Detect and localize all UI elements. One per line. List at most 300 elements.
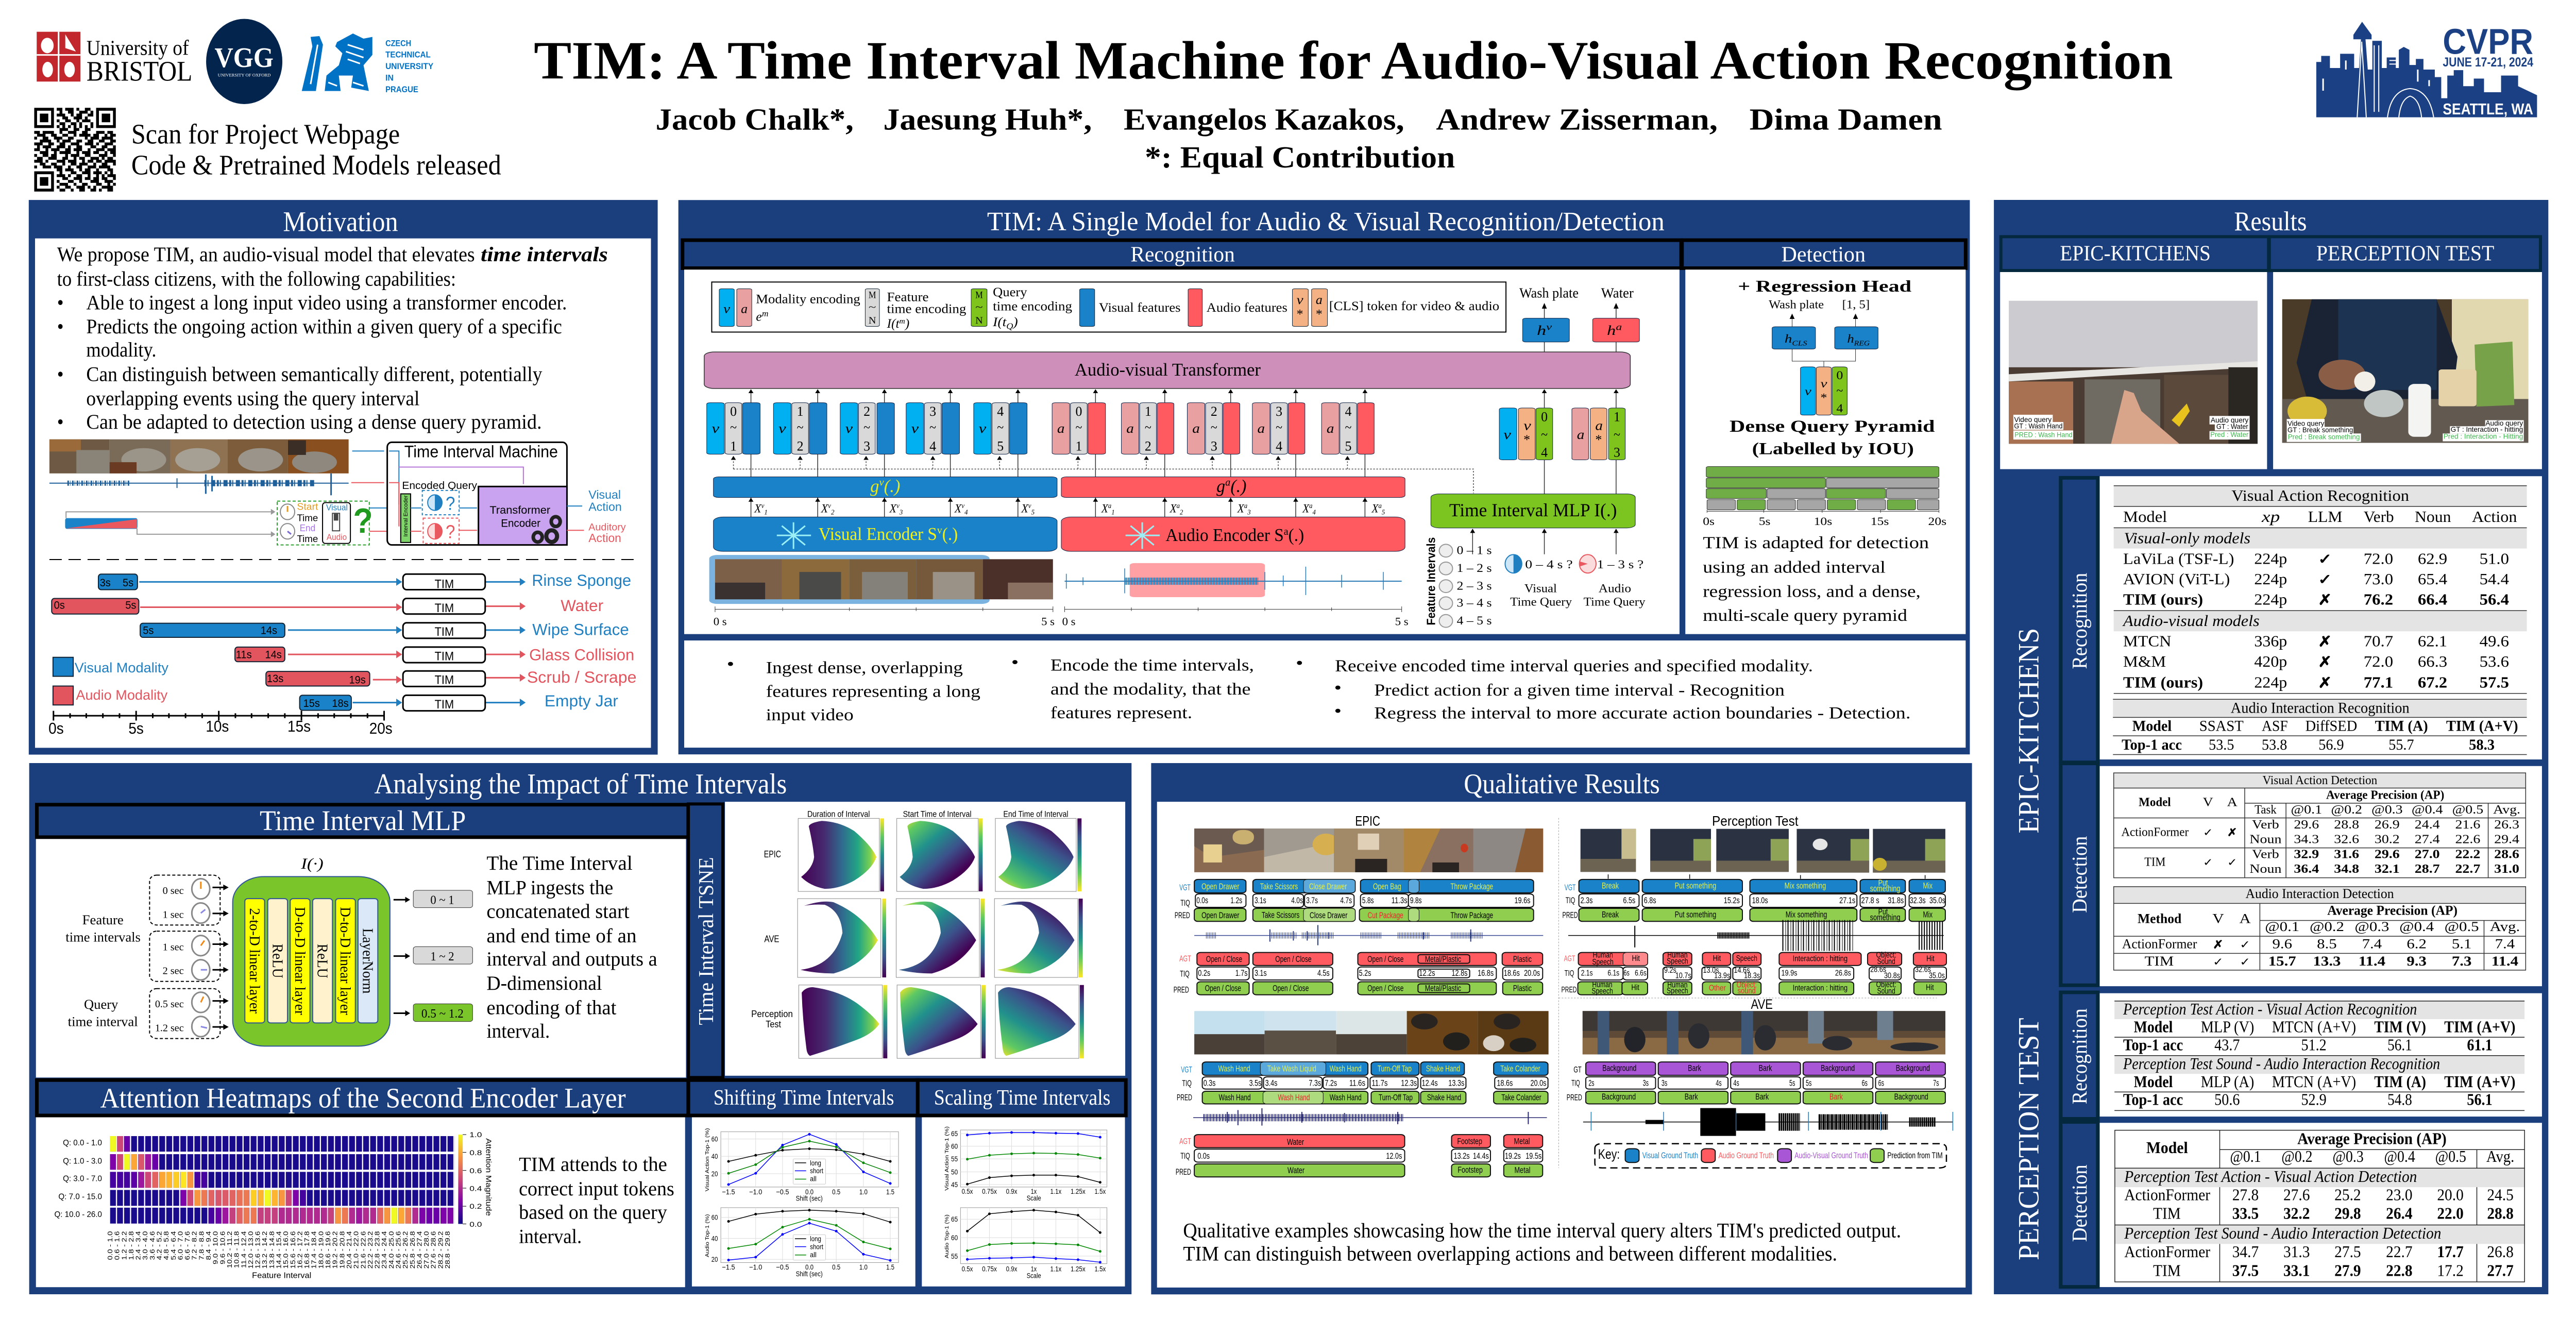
table: visual action recognition: 65.4 [2418,571,2447,588]
AVE: rows: Bark [1829,1092,1843,1102]
line chart: scale audio: 0.9x [1006,1264,1018,1273]
legend box: a [741,301,748,316]
interval timeline rows: 5s [123,577,133,589]
Perception Test: visual rows: 18.0s [1752,896,1768,905]
AVE: rows: Background [1896,1063,1930,1073]
EPIC-KITCHENS results section [2012,476,2542,986]
query tokens: v [1503,427,1511,442]
subheader: PERCEPTION TEST: PERCEPTION TEST [2316,242,2494,265]
EPIC example 1: visual labels: 4.7s [1340,896,1352,905]
audio tokens: 2 [1211,404,1217,419]
table: visual action detection: 36.4 [2294,862,2319,876]
EPIC example 2: audio rows: 0.0s [1197,1152,1210,1161]
EPIC example 2: visual rows: Wash Hand [1330,1064,1362,1073]
time interval machine diagram: Interval Encoder [402,495,409,537]
logo: Czech Technical University in Prague: PRAGUE [385,84,418,94]
table: audio interaction recognition: 53.5 [2209,736,2234,753]
EPIC example 2: visual rows [1177,1062,1548,1104]
right column: TSNE, shifting and scaling [688,802,1126,1287]
bottom bullets: Ingest dense, overlapping [766,658,963,677]
EPIC example 1: audio rows: 5.2s [1359,969,1371,978]
demo video: EPIC-KITCHENS: GT : Wash Hand [2014,422,2062,430]
attention heatmap chart: 1.2 - 2.2 [121,1231,128,1260]
section titles [1355,814,1799,1012]
legend box: a [1316,293,1323,307]
subheader: scaling time intervals [918,1080,1126,1115]
AVE: rows: TIQ [1571,1078,1580,1088]
attention heatmap chart: 24.6 - 25.6 [395,1231,402,1269]
audio tokens: 0 [1075,404,1082,419]
table: perception test detection: 33.5 [2232,1205,2259,1223]
demo video: Perception Test: Audio query [2485,420,2523,428]
motivation text block: • [57,316,64,338]
AVE: rows: GT [1573,1065,1582,1074]
attention heatmap chart: 22.2 - 23.2 [367,1231,375,1269]
table: visual action detection: 26.9 [2375,818,2400,832]
table: perception test recognition: MLP (A) [2201,1073,2254,1091]
table: visual action recognition: Noun [2415,509,2451,526]
table: visual action recognition: 56.4 [2480,591,2509,608]
logo: University of Bristol [37,32,192,87]
audio tokens [1052,403,1374,454]
AVE: rows: 3s [1662,1078,1667,1088]
Perception Test: visual rows: 6.8s [1644,896,1656,905]
line chart: scale audio: 0.75x [982,1264,997,1273]
Perception Test: audio rows: 32.6s [1915,965,1931,974]
panel: TIM single model: TIM is adapted for detection [1703,533,1929,552]
authors: Jaesung Huh*, [883,103,1092,137]
MLP description: The Time Interval [486,852,633,874]
arrows between tokens, encoders and transformer: 4 [1313,509,1316,516]
table: perception test detection: @0.2 [2281,1148,2313,1165]
subheader: attention heatmaps [37,1080,688,1115]
line chart: shift visual: −1.5 [722,1188,735,1196]
arrows between tokens, encoders and transformer: v [761,502,765,510]
visual tokens: ~ [730,420,737,435]
Perception Test: audio rows: 14.6s [1734,966,1750,975]
attention heatmap chart: 0.6 - 1.6 [114,1231,121,1260]
table: audio interaction detection: @0.2 [2310,919,2344,934]
table: visual action recognition: Verb [2364,509,2394,526]
MLP description: MLP ingests the [486,876,613,899]
feature intervals and queries [1425,537,1646,628]
line chart: shift audio: 1.5 [886,1263,894,1271]
arrows between tokens, encoders and transformer: v [961,502,965,510]
table: audio interaction recognition: 58.3 [2469,736,2495,753]
interval timeline rows: Glass Collision [529,646,634,664]
EPIC example 1: waveform [1194,925,1543,945]
EPIC example 2: audio rows: 19.5s [1526,1152,1541,1161]
table: visual action detection: Noun [2249,862,2281,876]
query tokens: 1 [1614,410,1620,424]
MLP network block: LayerNorm [360,928,376,994]
time axis: 10s [206,718,229,736]
bottom bullets: • [1011,653,1019,671]
subheader: detection [1682,240,1965,268]
time interval machine diagram: Transformer [489,504,550,516]
panel: TIM single model: Time Query [1584,595,1646,608]
legend box: ) [904,316,909,331]
interval timeline rows: TIM [435,697,454,711]
legend box: e [756,309,769,324]
panel: motivation [29,200,658,755]
feature intervals and queries: 0 – 4 s ? [1525,558,1573,571]
EPIC example 1: audio rows: Metal/Plastic [1425,955,1461,964]
table: visual action recognition: Model [2123,509,2167,526]
panel: analysing the impact of time intervals [29,763,1131,1294]
table: visual action recognition: ✗ [2318,634,2332,650]
detection: regression head: 0 [1836,369,1843,382]
table: visual action recognition: 224p [2254,551,2287,568]
table: visual action detection: A [2227,795,2238,809]
detection: regression head: CLS [1792,340,1807,347]
interval timeline rows: 5s [143,624,154,637]
line chart: shift audio: long [810,1235,821,1243]
MLP network block: ReLU [269,944,286,978]
EPIC example 1: visual labels: Throw Package [1450,882,1493,891]
arrows between tokens, encoders and transformer: v [828,502,831,510]
table: audio interaction detection: 11.4 [2492,954,2518,969]
subheader: PERCEPTION TEST [2269,236,2540,270]
Perception Test: audio rows: 30.8s [1884,971,1900,980]
table: perception test detection: 22.7 [2386,1243,2413,1261]
key legend: Audio-Visual Ground Truth [1794,1151,1868,1160]
line chart: shift visual: 60 [711,1135,718,1143]
bottom bullets: Receive encoded time interval queries and specified modality. [1335,656,1813,675]
EPIC example 1: visual labels: Cut Package [1368,911,1403,920]
arrows between tokens, encoders and transformer: X [1371,502,1389,515]
motivation text block: to first-class citizens, with the following capabilities: [57,268,456,291]
table: visual action detection: 32.1 [2375,862,2400,876]
pyramid axis labels: 0s [1703,515,1715,528]
EPIC example 1: visual rows [1194,880,1534,921]
EPIC example 1: audio rows: Open / Close [1206,955,1242,964]
table: visual action detection: 27.0 [2415,847,2440,861]
table: visual action detection: 31.6 [2334,847,2359,861]
line chart: shift audio: all [810,1250,817,1259]
Perception Test: audio rows: Speech [1592,957,1614,967]
line chart: shift visual: 40 [711,1152,718,1160]
attention heatmap chart: 19.8 - 20.8 [338,1231,346,1269]
output predictions: v [1546,322,1552,332]
table: visual action recognition: 49.6 [2480,633,2509,650]
table: visual action detection: 22.2 [2455,847,2480,861]
timelines [714,606,1409,628]
Perception Test: visual rows: 6.5s [1623,896,1635,905]
table: perception test recognition: TIM (A+V) [2444,1018,2515,1036]
Perception Test: audio rows: Human [1667,951,1687,959]
table: audio interaction detection: ✓ [2213,955,2224,968]
attention heatmap chart: 26.4 - 27.4 [416,1231,423,1269]
Perception Test: audio rows: 18.3s [1744,971,1760,980]
Perception Test: visual rows: TIQ [1566,896,1575,905]
section titles: Perception Test [1712,814,1799,829]
line chart: shift audio: 60 [711,1213,718,1222]
g visual and g audio layers: g [870,477,891,496]
EPIC example 2: audio rows: 19.2s [1505,1152,1521,1161]
attention heatmap chart: 4.8 - 5.8 [163,1231,171,1260]
table: perception test detection: 34.7 [2232,1243,2259,1261]
interval timeline rows: Scrub / Scrape [527,669,637,686]
table: perception test recognition: MTCN (A+V) [2272,1018,2356,1036]
table: perception test detection: ActionFormer [2124,1186,2210,1204]
attention heatmap chart: 3.6 - 4.6 [149,1231,157,1260]
Perception Test: visual rows: Break [1602,910,1619,920]
audio tokens: ~ [1145,420,1151,435]
Perception Test: audio rows: AGT [1564,954,1575,963]
attention heatmap chart: 14.4 - 15.4 [275,1231,283,1269]
TSNE plots: Start Time of Interval [903,809,972,819]
table: perception test detection: 27.5 [2334,1243,2361,1261]
detection: regression head: ~ [1836,384,1843,397]
EPIC example 1: audio rows: Open / Close [1367,955,1403,964]
TSNE plots: Duration of Interval [807,809,870,819]
line chart: shift visual: −1.0 [749,1188,762,1196]
EPIC example 1: audio rows: AGT [1179,954,1191,963]
modality legend [53,657,168,705]
attention heatmap chart: 0.8 [469,1149,482,1157]
table: perception test recognition: MLP (V) [2201,1018,2254,1036]
recognition tab: Recognition [2069,573,2091,669]
Perception Test: audio rows: sound [1738,986,1756,995]
EPIC example 2: visual rows: Wash Hand [1219,1093,1251,1103]
Perception Test: audio rows: 6.6s [1635,969,1647,977]
MLP diagram: feature and query intervals: 2 sec [163,965,184,976]
EPIC example 1: audio rows: 3.1s [1255,969,1267,978]
table: audio interaction detection: @0.4 [2399,919,2434,934]
MLP description: and end time of an [486,924,637,947]
table: audio interaction detection: 13.3 [2313,954,2341,969]
table: visual action detection: 28.8 [2334,818,2359,832]
audio tokens: 3 [1211,439,1217,454]
attention heatmap chart: Attention Magnitude [484,1138,493,1216]
Perception Test: audio rows: PRED [1561,985,1577,994]
interval timeline rows: Empty Jar [545,692,618,710]
line chart: shift visual: 1.5 [886,1188,894,1196]
table: perception test detection: 20.0 [2437,1186,2464,1204]
EPIC example 2: waveform [1193,1108,1547,1126]
attention heatmap chart: 9.0 - 10.0 [212,1231,219,1264]
attention heatmap chart: 3.0 - 4.0 [142,1231,149,1260]
visual tokens [707,403,1027,454]
query tokens: ~ [1541,427,1548,442]
table: perception test detection: ActionFormer [2124,1243,2210,1261]
logos and QR code block: TECHNICAL [385,50,431,59]
table: perception test recognition: 61.1 [2467,1036,2493,1054]
table: visual action recognition: 66.3 [2418,653,2447,671]
Perception Test: audio rows: 26.8s [1835,969,1851,977]
visual tokens: ~ [929,420,936,435]
table: perception test recognition: Model [2134,1073,2173,1091]
Perception Test: audio rows: Speech [1591,987,1613,996]
interval timeline rows: TIM [435,649,454,663]
table: perception test detection: 33.1 [2283,1262,2310,1280]
line chart: shift visual: −0.5 [776,1188,789,1196]
table: visual action recognition: ✗ [2318,654,2332,670]
EPIC example 2: visual rows: Take Colander [1501,1093,1541,1103]
analysing heading: Analysing the Impact of Time Intervals [375,768,787,800]
table: visual action recognition [2114,486,2527,694]
time interval machine diagram: Auditory [588,522,626,533]
EPIC example 1: audio rows: PRED [1174,985,1189,994]
AVE: rows: 7s [1933,1078,1939,1088]
legend box: m [762,309,769,318]
time interval machine diagram: Visual [588,488,621,501]
legend box: ~ [869,301,876,312]
EPIC example 1: visual labels: 4.0s [1291,896,1303,905]
line chart: scale visual: 60 [951,1142,958,1151]
photo strip: EPIC top [1194,828,1543,872]
table: visual action detection: V [2203,795,2213,809]
query interval selector: End [300,523,315,533]
legend box: Q [1006,322,1013,331]
feature intervals and queries: 1 – 3 s ? [1597,558,1643,571]
EPIC example 2: visual rows: 7.2s [1325,1078,1337,1088]
EPIC example 2: visual rows: Shake Hand [1426,1064,1460,1073]
EPIC example 2: visual rows: Turn-Off Tap [1379,1093,1413,1103]
visual tokens: 1 [797,404,804,419]
table: audio interaction recognition: TIM (A) [2375,718,2428,734]
Perception Test: audio rows: Hit [1926,983,1934,992]
MLP network block: D-to-D linear layer [292,907,308,1015]
bottom bullets: • [1334,678,1342,697]
table: visual action detection: Noun [2249,832,2281,846]
table: perception test detection: 29.8 [2334,1205,2361,1223]
line chart: scale visual: 0.5x [962,1187,973,1196]
table: audio interaction detection: 9.6 [2272,937,2292,952]
table: perception test recognition: 56.1 [2467,1091,2493,1109]
attention heatmap chart: 0.6 [469,1168,482,1175]
bottom bullets: • [727,654,734,673]
Perception Test: visual rows: 31.8s [1888,896,1904,905]
legend box: v [723,301,730,316]
interval timeline rows: 14s [265,649,282,661]
g visual and g audio layers: g [1216,477,1238,496]
Perception Test: visual rows: VGT [1565,883,1575,892]
table: perception test recognition: 56.1 [2387,1036,2412,1054]
table: visual action detection: Verb [2252,818,2279,832]
EPIC example 2: audio rows: Metal [1514,1165,1531,1175]
Perception Test: waveform [1568,926,1944,948]
time interval machine diagram: Action [588,500,622,514]
Perception Test: visual rows: Put something [1675,881,1716,890]
demo video: Perception Test [2282,299,2528,443]
table: visual action recognition: 62.1 [2418,633,2447,650]
arrows between tokens, encoders and transformer: 5 [1031,509,1035,516]
Perception Test: audio rows: Hit [1632,954,1640,963]
attention heatmap chart: Q: 0.0 - 1.0 [63,1138,102,1147]
bottom bullets: • [1334,701,1342,720]
EPIC example 1: audio rows: 0.2s [1198,969,1210,978]
g visual and g audio layers: (.) [1230,477,1246,496]
EPIC example 2: visual rows: 12.3s [1401,1078,1417,1088]
Perception Test: audio rows [1561,951,1946,996]
EPIC example 2: visual rows: Take Colander [1500,1064,1540,1073]
TSNE plots: EPIC [764,849,781,860]
motivation text block: We propose TIM, an audio-visual model that elevates [57,244,475,266]
legend box: I(t [993,315,1021,329]
legend box: M [869,289,876,300]
table: perception test detection: @0.3 [2332,1148,2364,1165]
time interval TSNE tab: Time Interval TSNE [694,857,718,1025]
table: visual action detection: 28.7 [2415,862,2440,876]
demo video: Perception Test: Video query [2287,420,2324,428]
feature intervals and queries: 1 – 2 s [1457,562,1492,575]
motivation text block: modality. [86,339,156,362]
arrows between tokens, encoders and transformer: 2 [1180,509,1183,516]
audio tokens: 2 [1145,439,1151,454]
table: perception test recognition: TIM (V) [2374,1018,2426,1036]
dense query pyramid heading [1730,417,1935,458]
attention heatmap chart: Q: 7.0 - 15.0 [58,1192,102,1201]
audio waveform [49,474,349,495]
line chart: shift visual: long [810,1159,821,1167]
table: audio interaction recognition: Audio Interaction Recognition [2231,699,2410,716]
table: perception test detection: @0.1 [2230,1148,2261,1165]
table: perception test recognition: 51.2 [2301,1036,2327,1054]
MLP diagram: feature and query intervals: Feature [82,912,124,927]
visual tokens: 4 [929,439,936,454]
line chart: scale visual: 1.5x [1094,1187,1106,1196]
output predictions [1519,285,1639,352]
AVE: rows: Bark [1688,1063,1701,1073]
project webpage text: Scan for Project Webpage [131,119,400,150]
table: visual action recognition: 73.0 [2364,571,2393,588]
MLP outputs [394,890,472,1022]
Perception Test: visual rows: 27.8 s [1861,896,1879,905]
table: audio interaction recognition: TIM (A+V) [2446,718,2518,734]
EPIC example 1: audio rows: 18.6s [1504,969,1520,978]
attention heatmap chart: 6.0 - 7.0 [177,1231,184,1260]
legend box: Query [993,285,1027,299]
table: audio interaction recognition: DiffSED [2306,718,2357,734]
time axis: 15s [287,718,311,736]
Perception Test: audio rows: Human [1667,980,1687,990]
Perception Test: audio rows: 19.9s [1781,969,1798,977]
attention heatmap chart: Q: 3.0 - 7.0 [63,1174,102,1183]
Perception Test: visual rows: Mix something [1785,881,1826,890]
AVE: rows: 3s [1643,1078,1649,1088]
table: perception test detection: 24.5 [2487,1186,2514,1204]
attention heatmap chart: 9.6 - 10.6 [219,1231,227,1264]
table: visual action detection: 32.6 [2334,832,2359,846]
EPIC example 1: visual labels: Open Bag [1373,882,1401,891]
table: visual action detection: 22.6 [2455,832,2480,846]
Perception Test: audio rows: Hit [1631,983,1639,992]
key legend: Key: [1598,1147,1620,1162]
EPIC example 2: audio rows: TIQ [1180,1152,1190,1161]
EPIC example 1: audio rows: TIQ [1180,969,1190,979]
demo video: Perception Test: GT : Interaction - hitting [2451,426,2523,433]
detection: regression head: Wash plate [1769,298,1824,311]
legend box: N [975,315,983,326]
audio tokens: 3 [1276,404,1282,419]
table: visual action recognition: LaViLa (TSF-L) [2123,551,2234,568]
line chart: shift audio: −1.0 [749,1263,762,1271]
logos and QR code block: UNIVERSITY [385,61,433,71]
subheader: time interval MLP: Time Interval MLP [260,805,466,836]
attention heatmap chart: 28.2 - 29.2 [437,1231,445,1269]
table: visual action detection: 28.6 [2494,847,2519,861]
attention heatmap chart: 0.0 - 1.0 [107,1231,114,1260]
EPIC example 1: visual labels: 9.8s [1410,896,1422,905]
audio tokens: 4 [1345,404,1351,419]
EPIC example 2: audio rows: PRED [1176,1168,1191,1177]
MLP description: D-dimensional [486,972,602,994]
visual tokens: ~ [997,420,1004,435]
table: audio interaction detection: 6.2 [2406,937,2427,952]
table: perception test detection: 27.6 [2283,1186,2310,1204]
